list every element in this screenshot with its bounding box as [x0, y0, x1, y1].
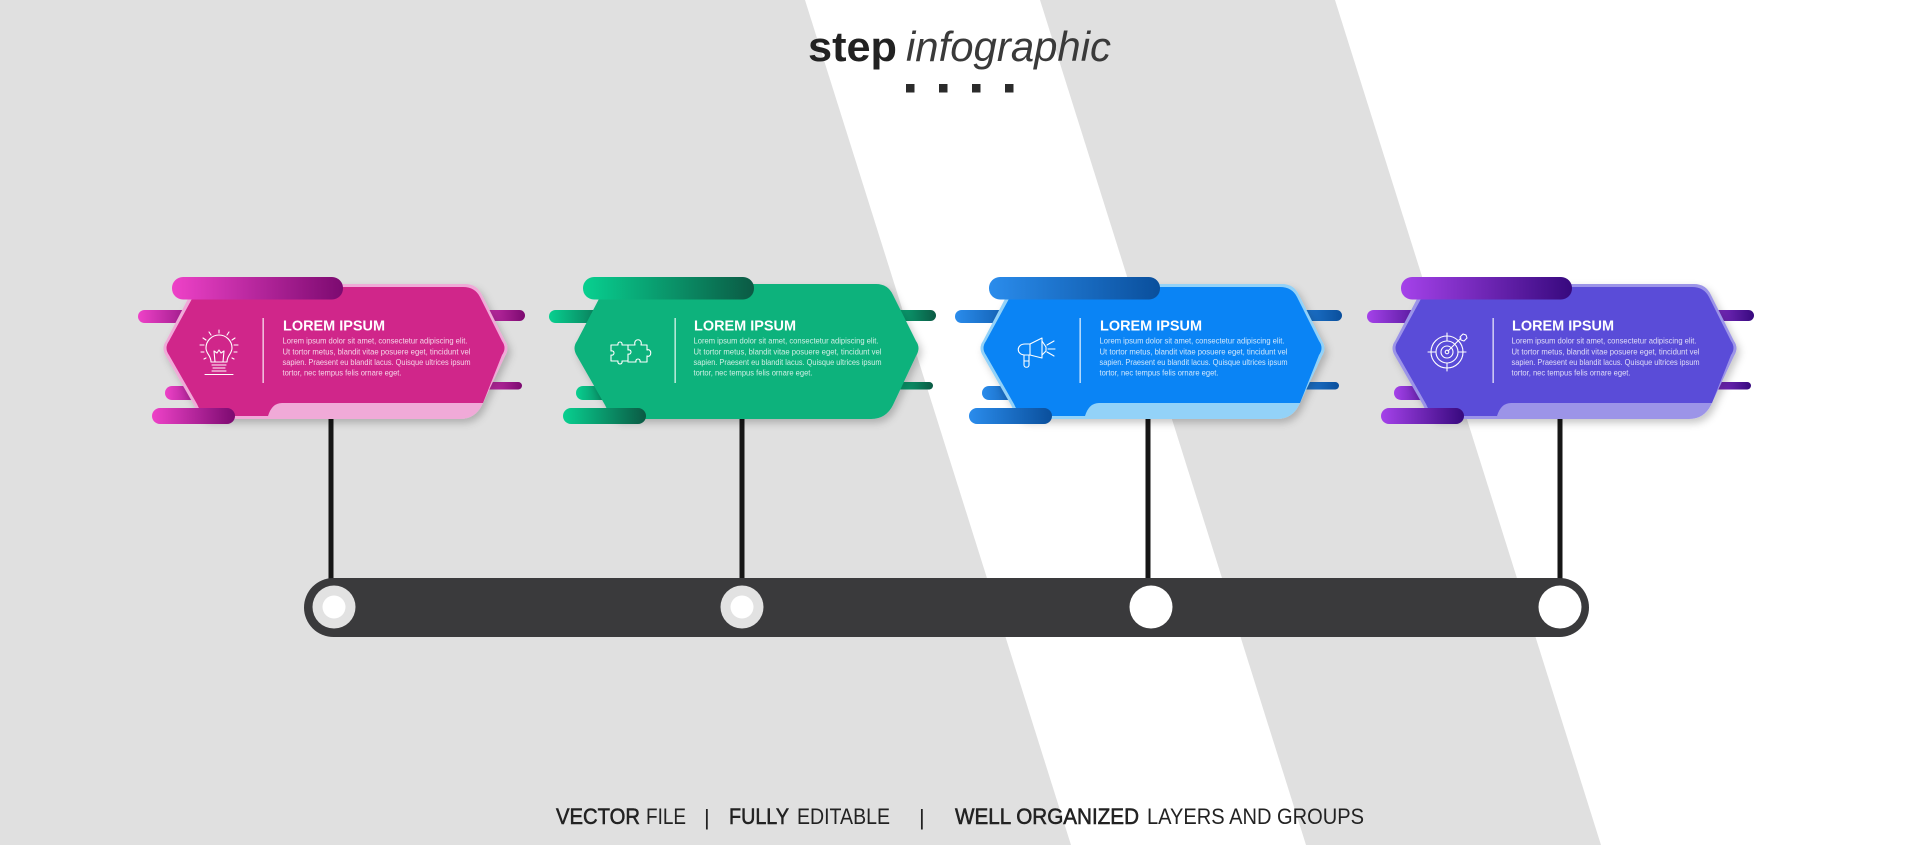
body text: Lorem ipsum dolor sit amet, consectetur adipiscing elit.: [694, 335, 878, 345]
footer feature line: EDITABLE: [797, 804, 890, 829]
body text: tortor, nec tempus felis ornare eget.: [694, 368, 812, 378]
body text: tortor, nec tempus felis ornare eget.: [1100, 368, 1218, 378]
body text: Ut tortor metus, blandit vitae posuere eget, tincidunt vel: [1512, 346, 1700, 356]
timeline node 1: [312, 586, 356, 628]
footer feature line: FULLY: [729, 804, 789, 829]
heading: LOREM IPSUM: [1100, 318, 1202, 335]
footer feature line: |: [704, 805, 710, 830]
footer feature line: [556, 804, 1364, 830]
panel: step 2 green: [549, 277, 936, 424]
footer feature line: LAYERS AND GROUPS: [1147, 804, 1364, 829]
heading: LOREM IPSUM: [1512, 318, 1614, 335]
panel: step 1 pink: [138, 277, 525, 424]
body text: [1100, 335, 1288, 378]
timeline connector stems: [328, 415, 1562, 583]
body text: sapien. Praesent eu blandit lacus. Quisque ultrices ipsum: [1512, 357, 1700, 367]
body text: tortor, nec tempus felis ornare eget.: [282, 368, 402, 378]
icon: megaphone: [1018, 338, 1055, 367]
panel: step 3 blue: [955, 277, 1342, 424]
body text: sapien. Praesent eu blandit lacus. Quisque ultrices ipsum: [1100, 357, 1288, 367]
heading: LOREM IPSUM: [694, 318, 796, 335]
panel: step 4 purple: [1367, 277, 1754, 424]
title dots: [906, 84, 1014, 92]
body text: Lorem ipsum dolor sit amet, consectetur adipiscing elit.: [1512, 335, 1696, 345]
body text: [282, 335, 471, 378]
body text: Ut tortor metus, blandit vitae posuere eget, tincidunt vel: [1100, 346, 1288, 356]
title: [808, 23, 1111, 70]
title: step: [808, 23, 897, 70]
body text: Lorem ipsum dolor sit amet, consectetur adipiscing elit.: [282, 335, 468, 345]
timeline node 2: [720, 586, 764, 628]
icon: target with dart: [1428, 333, 1467, 371]
timeline bar: [304, 578, 1589, 637]
body text: Lorem ipsum dolor sit amet, consectetur adipiscing elit.: [1100, 335, 1284, 345]
body text: [1512, 335, 1700, 378]
footer feature line: WELL ORGANIZED: [955, 804, 1139, 829]
footer feature line: VECTOR: [556, 804, 640, 829]
icon: puzzle pieces: [611, 340, 651, 364]
divider: [1492, 318, 1494, 383]
body text: [694, 335, 882, 378]
divider: [1080, 318, 1081, 383]
body text: Ut tortor metus, blandit vitae posuere eget, tincidunt vel: [694, 346, 882, 356]
heading: LOREM IPSUM: [283, 318, 385, 335]
footer feature line: |: [919, 805, 925, 830]
timeline node 4: [1538, 586, 1582, 628]
timeline node 3: [1130, 586, 1172, 628]
title: infographic: [906, 23, 1111, 70]
body text: sapien. Praesent eu blandit lacus. Quisque ultrices ipsum: [282, 357, 470, 367]
body text: sapien. Praesent eu blandit lacus. Quisque ultrices ipsum: [694, 357, 882, 367]
divider: [674, 318, 676, 383]
body text: tortor, nec tempus felis ornare eget.: [1512, 368, 1630, 378]
body text: Ut tortor metus, blandit vitae posuere eget, tincidunt vel: [282, 346, 471, 356]
icon: light bulb: [200, 330, 238, 374]
footer feature line: FILE: [646, 804, 686, 829]
divider: [262, 318, 264, 383]
